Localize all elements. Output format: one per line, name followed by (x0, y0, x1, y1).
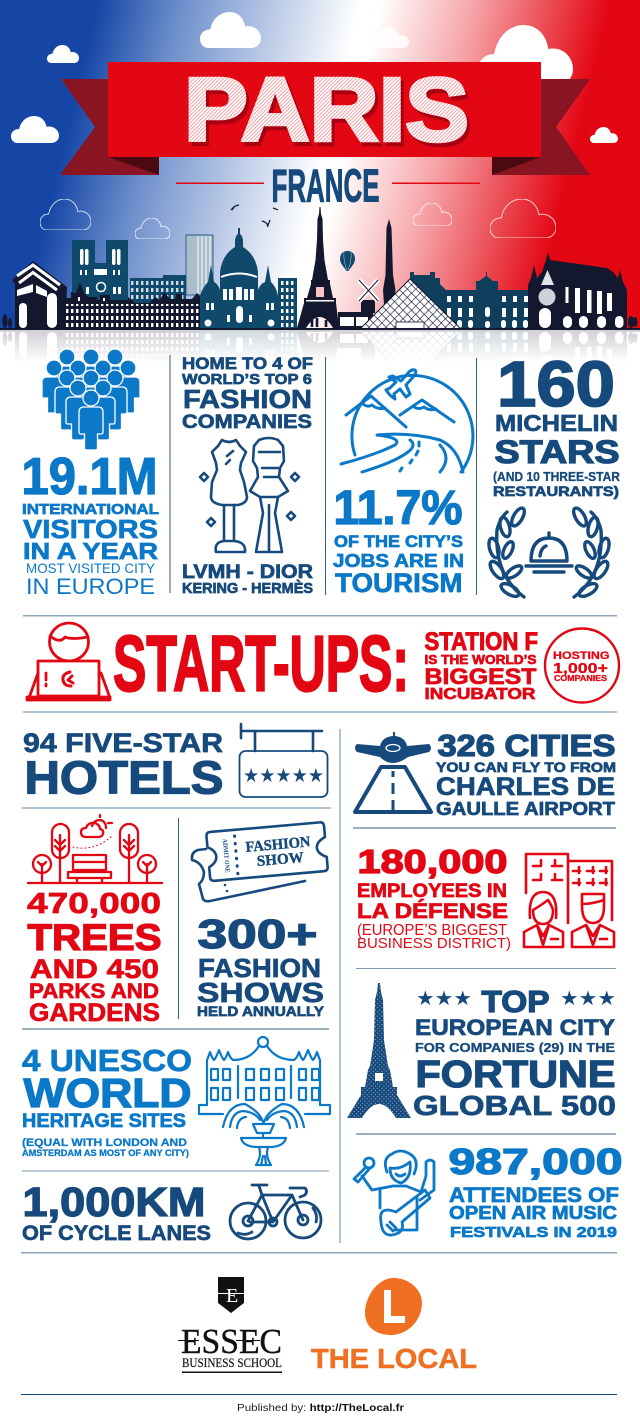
icon: dress forms (200, 438, 299, 552)
stat text: brands: KERING - HERMÈS (182, 580, 313, 597)
stat text: La Defense: BUSINESS DISTRICT) (357, 935, 511, 952)
stat text: La Defense: (EUROPE’S BIGGEST (357, 922, 507, 939)
stat text: hotels (23, 728, 224, 804)
divider (23, 712, 617, 713)
stat text: UNESCO: AMSTERDAM AS MOST OF ANY CITY) (22, 1148, 189, 1159)
stat text: cycle lanes: 1,000KM (22, 1179, 206, 1225)
divider (21, 1252, 617, 1254)
outline clouds (40, 199, 556, 239)
stat text: fashion shows: FASHION (198, 953, 321, 983)
logo: ESSEC Business School: E (226, 1285, 238, 1307)
stat text: UNESCO: (EQUAL WITH LONDON AND (22, 1137, 187, 1149)
logo: ESSEC Business School: ESSEC (181, 1322, 282, 1361)
stat text: trees: AND 450 (30, 954, 159, 984)
panel: UNESCO (22, 1037, 330, 1165)
stat text: fashion shows: 300+ (198, 911, 318, 957)
panel: Fortune 500 (347, 983, 616, 1121)
stat text: Fortune 500: EUROPEAN CITY (415, 1015, 615, 1040)
stat text: La Defense (357, 843, 511, 952)
stat text: visitors: MOST VISITED CITY (26, 560, 156, 576)
stat text: La Defense: EMPLOYEES IN (357, 881, 507, 902)
stat text: airport: YOU CAN FLY TO FROM (436, 759, 616, 775)
stat text: UNESCO (22, 1043, 192, 1159)
logo: The Local: THE LOCAL (311, 1343, 477, 1374)
panel: hotels (23, 724, 328, 804)
panel: music festivals (354, 1141, 622, 1241)
divider lines, top row (170, 355, 476, 595)
stat text: brands: LVMH - DIOR (182, 562, 313, 583)
stat text: music festivals: OPEN AIR MUSIC (449, 1203, 617, 1223)
dark townhouses (65, 282, 204, 328)
clouds (11, 12, 618, 143)
stat text: music festivals (448, 1141, 622, 1241)
stat text: fashion heading: COMPANIES (182, 411, 312, 433)
logo: ESSEC Business School: BUSINESS SCHOOL (182, 1355, 282, 1370)
stat text: michelin: STARS (494, 434, 620, 470)
stars (416, 986, 616, 1010)
icon: hotel sign: ★★★★★ (243, 764, 324, 787)
stat text: trees: PARKS AND (29, 980, 159, 1003)
stat text: cycle lanes: OF CYCLE LANES (22, 1222, 211, 1245)
stat text: airport (436, 728, 616, 819)
stat text: fashion shows: SHOWS (197, 977, 324, 1008)
background: tricolour sky (0, 0, 640, 330)
icon: hotel sign (240, 724, 328, 797)
text: Station F: IS THE WORLD’S (424, 652, 537, 667)
panel: fashion companies (182, 355, 313, 597)
stat text: brands (182, 562, 313, 597)
icon: tickets: FASHION (245, 834, 311, 856)
heading: start-ups: START-UPS: (113, 618, 409, 708)
stat text: fashion heading: WORLD’S TOP 6 (182, 371, 312, 388)
subtitle: France: FRANCE (272, 160, 380, 212)
Sacre-Coeur (200, 228, 278, 328)
stat text: La Defense: 180,000 (358, 843, 508, 880)
panel: airport (355, 728, 616, 819)
logo: The Local (311, 1278, 477, 1374)
skyline reflection (0, 330, 640, 356)
stat text: airport: CHARLES DE (436, 773, 615, 801)
icon: chateau and fountain (199, 1037, 330, 1165)
Louvre palace (410, 272, 529, 328)
callout: hosting 1,000+ companies: COMPANIES (554, 673, 607, 683)
stat text: airport: 326 CITIES (438, 728, 616, 763)
icon: tickets: ADMIT ONE (221, 838, 231, 873)
stat text: trees: TREES (28, 917, 162, 958)
stat text: Fortune 500: FORTUNE (416, 1054, 616, 1096)
callout: hosting 1,000+ companies: 1,000+ (553, 660, 608, 677)
stat text: tourism: TOURISM (335, 568, 462, 598)
hot air balloon (340, 251, 355, 271)
icon: plane, mountains and road (341, 370, 473, 472)
central column divider (340, 729, 341, 1243)
stat text: trees: GARDENS (29, 999, 160, 1027)
stat text: Fortune 500: GLOBAL 500 (413, 1090, 616, 1121)
icon: Eiffel Tower (347, 983, 411, 1118)
horizon line (0, 328, 640, 330)
tall building (278, 278, 297, 328)
stat text: tourism: 11.7% (334, 482, 462, 535)
text: Station F: STATION F (424, 628, 538, 656)
panel: La Defense (357, 843, 614, 952)
stat text: trees (27, 888, 162, 1027)
windmill (359, 280, 378, 313)
stat text: michelin (493, 348, 620, 499)
icon: bicycle (230, 1185, 321, 1239)
stat text: fashion shows (197, 911, 325, 1019)
stat text: michelin: 160 (497, 348, 615, 420)
panel: trees (27, 815, 162, 1027)
stat text: Fortune 500 (413, 984, 616, 1121)
Arc de Triomphe (12, 261, 67, 328)
divider (23, 615, 617, 616)
icon: park (28, 815, 162, 883)
Louvre pyramid (360, 279, 461, 329)
stat text: fashion heading: FASHION (183, 384, 312, 414)
stat text: La Defense: LA DÉFENSE (357, 900, 508, 923)
icon: musician (354, 1151, 434, 1235)
stat text: fashion heading: HOME TO 4 OF (182, 355, 313, 373)
stat text: fashion heading (182, 355, 313, 433)
teal buildings and skyscraper (130, 235, 213, 303)
title: Paris: PARIS (184, 60, 469, 160)
panel: cycle lanes (22, 1179, 321, 1245)
stat text: UNESCO: 4 UNESCO (22, 1043, 192, 1078)
stat text: tourism: JOBS ARE IN (333, 550, 464, 571)
text: Station F: INCUBATOR (424, 686, 536, 703)
icon: office workers (524, 854, 614, 947)
stat text: hotels: 94 FIVE-STAR (23, 728, 223, 758)
icon: plane and runway (355, 732, 431, 812)
stat text: visitors: 19.1M (22, 448, 158, 506)
birds (231, 205, 278, 227)
icon: laptop worker (27, 623, 110, 700)
panel: start-ups (27, 618, 619, 708)
stat text: hotels: HOTELS (24, 752, 224, 804)
stat text: tourism (333, 482, 464, 598)
stars: ★★★ (416, 986, 472, 1010)
stat text: music festivals: FESTIVALS IN 2019 (450, 1224, 617, 1241)
Eiffel Tower (297, 207, 339, 328)
stat text: trees: 470,000 (27, 888, 161, 920)
stat text: michelin: RESTAURANTS) (493, 483, 619, 499)
stat text: music festivals: ATTENDEES OF (449, 1184, 619, 1207)
stars: ★★★ (560, 986, 616, 1010)
panel: michelin stars (487, 348, 620, 599)
stat text: airport: GAULLE AIRPORT (436, 799, 615, 819)
logo: ESSEC Business School (178, 1277, 282, 1373)
stat text: music festivals: 987,000 (448, 1141, 622, 1182)
divider (21, 1394, 617, 1395)
stat text: michelin: (AND 10 THREE-STAR (493, 470, 620, 484)
callout: hosting 1,000+ companies: HOSTING (553, 650, 610, 662)
stat text: Fortune 500: FOR COMPANIES (29) IN THE (415, 1041, 615, 1055)
obelisk (383, 219, 396, 304)
footer: published by: Published by: http://TheLocal.fr (237, 1402, 404, 1414)
panel: tourism (333, 370, 473, 598)
icon: crowd (42, 349, 140, 450)
stat text: cycle lanes (22, 1179, 211, 1245)
chapel (528, 252, 627, 328)
low building (338, 312, 373, 328)
trees (2, 314, 638, 328)
stat text: visitors: VISITORS (23, 514, 158, 544)
stat text: visitors: IN A YEAR (23, 538, 158, 564)
stat text: UNESCO: WORLD (24, 1070, 192, 1116)
callout: hosting 1,000+ companies (545, 628, 619, 702)
stat text: Fortune 500: TOP (482, 984, 550, 1019)
text: Station F (424, 628, 538, 703)
icon: laurel and cloche (487, 506, 611, 599)
panel: fashion shows (192, 822, 328, 1019)
panel: visitors (22, 349, 159, 599)
stat text: michelin: MICHELIN (495, 410, 618, 436)
stat text: UNESCO: HERITAGE SITES (22, 1111, 186, 1132)
stat text: fashion shows: HELD ANNUALLY (197, 1003, 325, 1019)
text: Station F: BIGGEST (424, 664, 537, 689)
stat text: visitors: IN EUROPE (26, 574, 155, 599)
skyline (0, 207, 640, 330)
title banner (60, 60, 590, 175)
Notre-Dame (72, 240, 128, 302)
stat text: tourism: OF THE CITY’S (334, 533, 463, 551)
stat text: visitors: INTERNATIONAL (22, 501, 159, 518)
stat text: visitors (22, 448, 159, 599)
icon: tickets: SHOW (256, 850, 304, 870)
icon: tickets (192, 822, 328, 901)
